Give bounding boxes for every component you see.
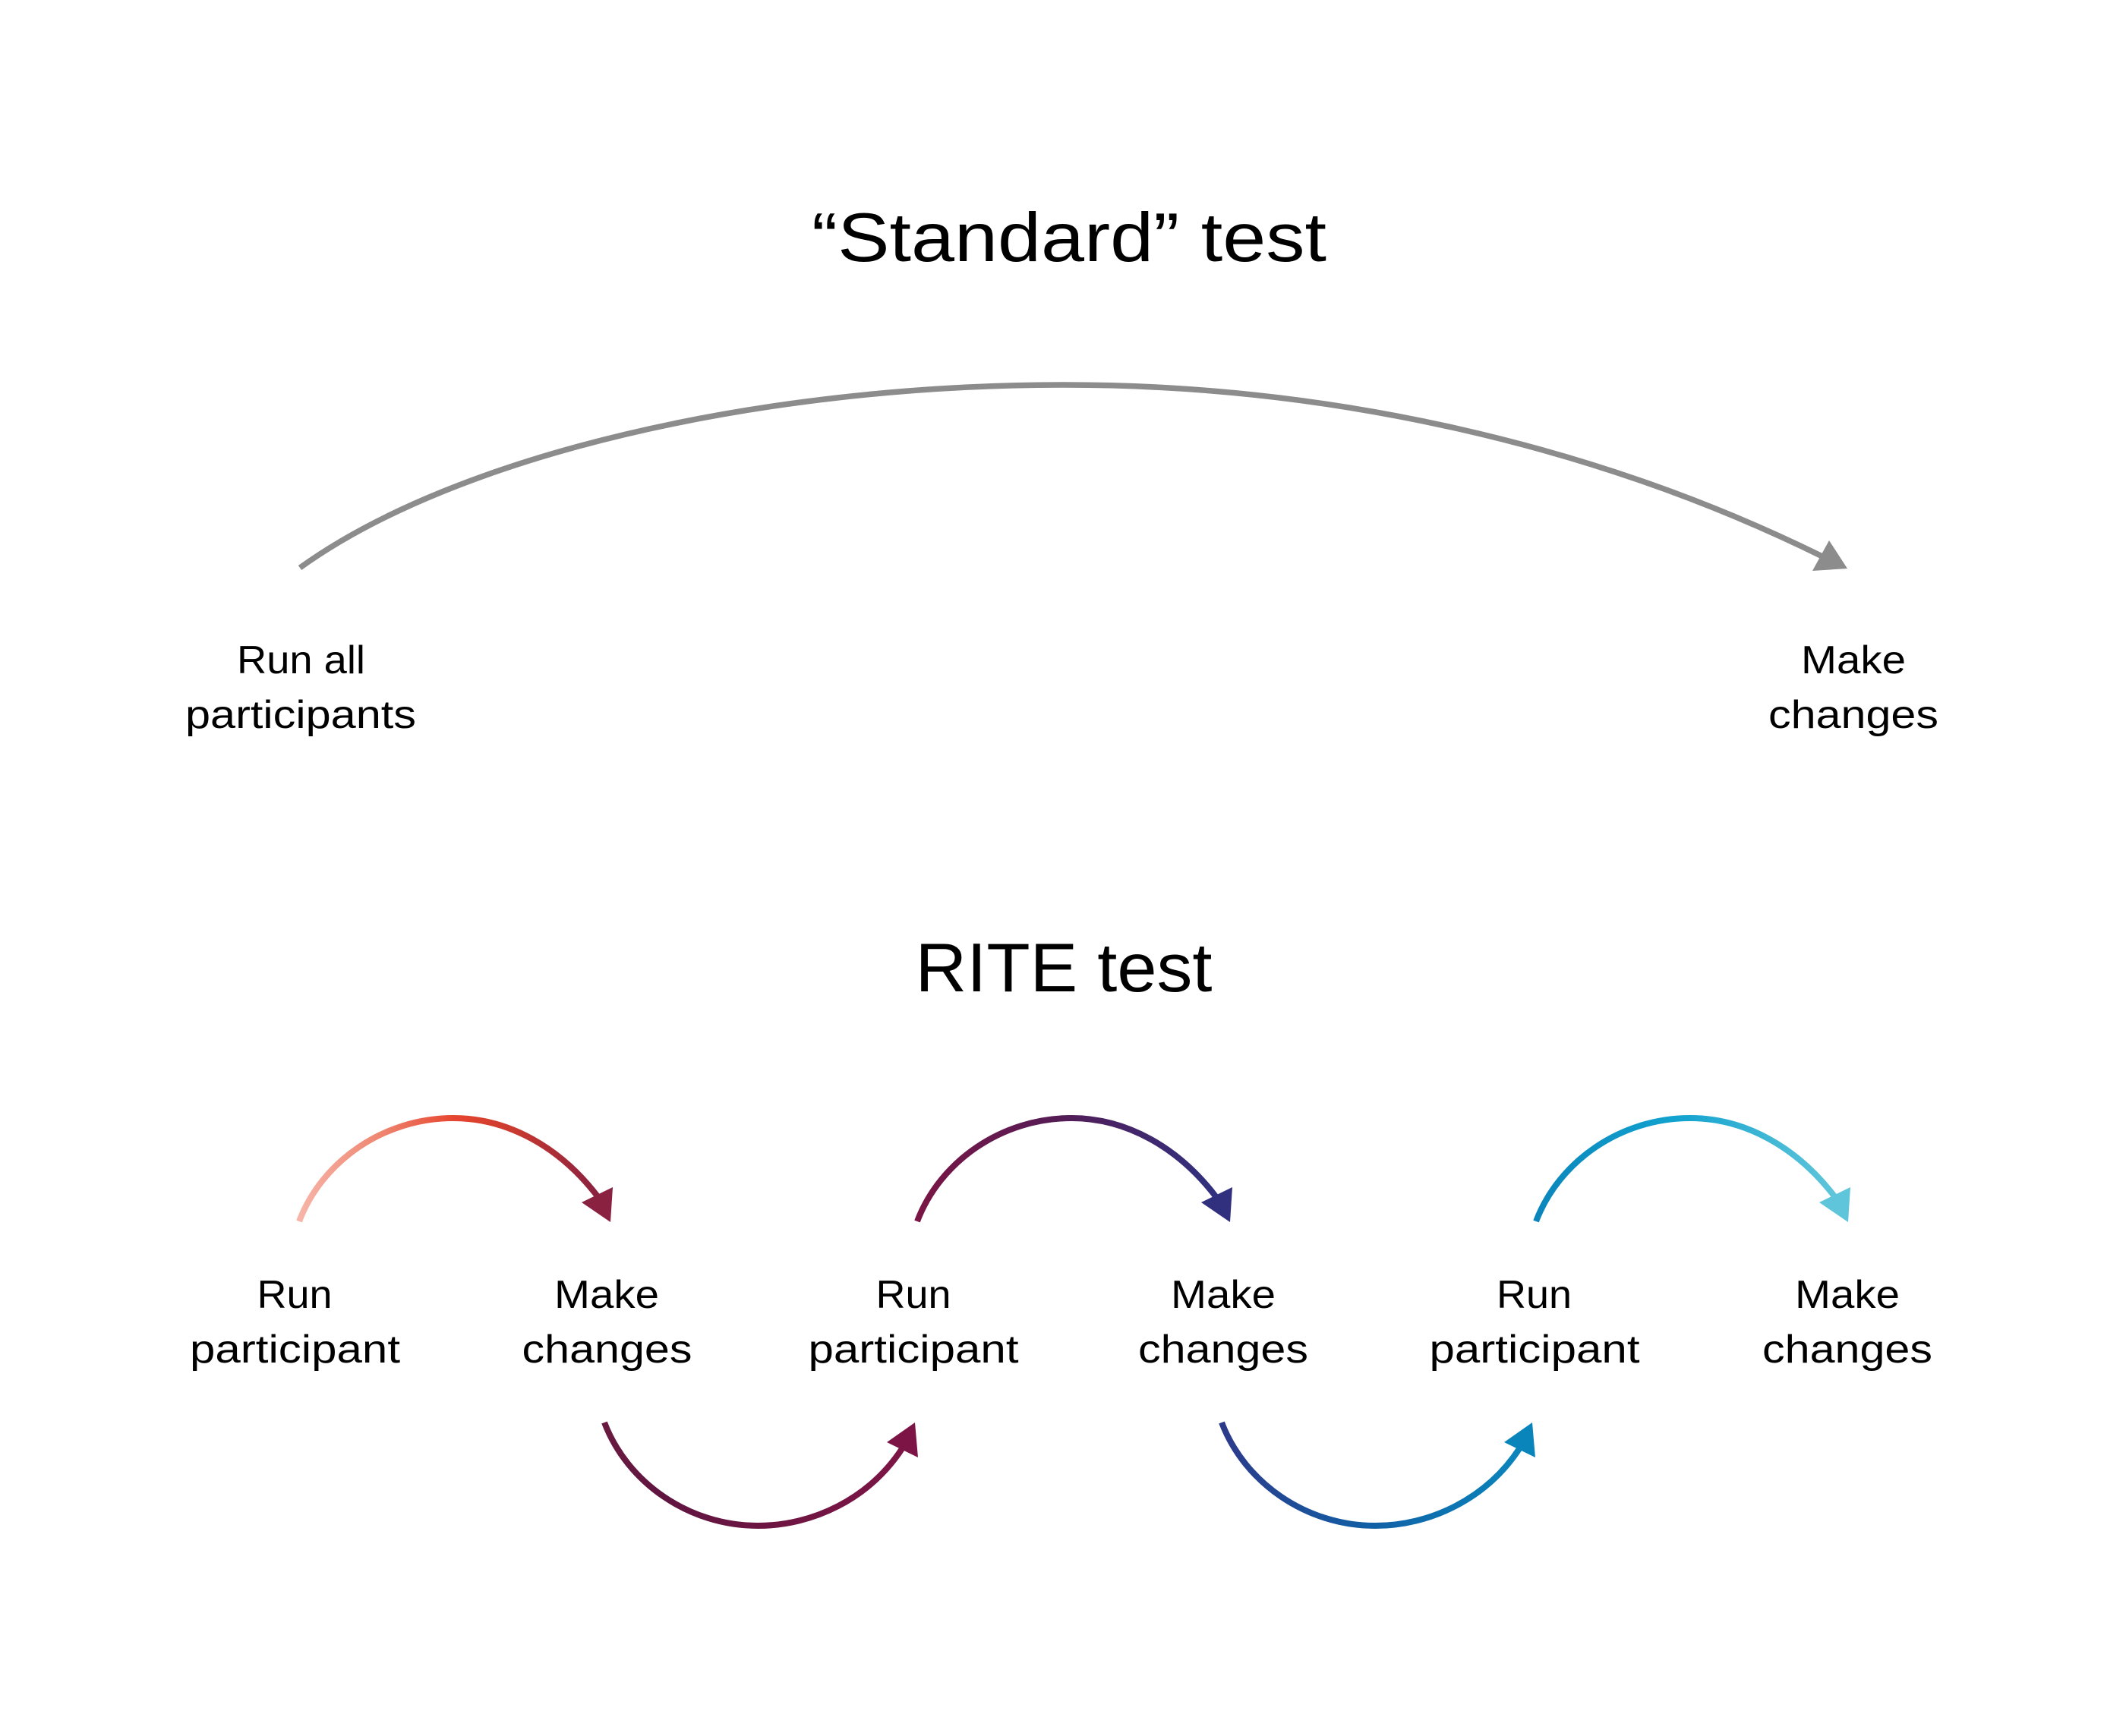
arrow: cyan run to make xyxy=(1536,1118,1850,1222)
label: Run participant 3: participant xyxy=(1429,1328,1640,1372)
label: Run participant 3: Run xyxy=(1497,1273,1572,1317)
label: Make changes xyxy=(1768,638,1938,737)
label: Run participant 2: Run xyxy=(876,1273,951,1317)
label: Run participant 3 xyxy=(1429,1273,1640,1372)
arrow: run all participants to make changes xyxy=(300,385,1847,571)
label: Run participant 1: participant xyxy=(190,1328,401,1372)
label: Run participant 2 xyxy=(808,1273,1019,1372)
label: Run participant 1 xyxy=(190,1273,401,1372)
label: Make changes 2: changes xyxy=(1138,1328,1308,1372)
panel: RITE test xyxy=(190,930,1932,1526)
arrow: maroon make to run xyxy=(604,1423,918,1526)
label: Run participant 1: Run xyxy=(257,1273,333,1317)
label: Make changes 3 xyxy=(1762,1273,1932,1372)
label: Make changes 1: changes xyxy=(522,1328,692,1372)
label: Run all participants: participants xyxy=(185,693,416,737)
arrow: blue make to run xyxy=(1222,1423,1535,1526)
label: Make changes 3: changes xyxy=(1762,1328,1932,1372)
label: Make changes 1: Make xyxy=(554,1273,659,1317)
heading: RITE test: RITE test xyxy=(916,930,1212,1007)
label: Make changes: changes xyxy=(1768,693,1938,737)
label: Make changes: Make xyxy=(1801,638,1906,682)
label: Make changes 3: Make xyxy=(1795,1273,1900,1317)
label: Run all participants xyxy=(185,638,416,737)
label: Make changes 1 xyxy=(522,1273,692,1372)
label: Run participant 2: participant xyxy=(808,1328,1019,1372)
arrow: purple run to make xyxy=(917,1118,1232,1222)
panel: standard test xyxy=(185,200,1938,737)
arrow: coral run to make xyxy=(299,1118,613,1222)
label: Run all participants: Run all xyxy=(237,638,365,682)
label: Make changes 2 xyxy=(1138,1273,1308,1372)
label: Make changes 2: Make xyxy=(1171,1273,1276,1317)
heading: Standard test: “Standard” test xyxy=(812,200,1326,276)
